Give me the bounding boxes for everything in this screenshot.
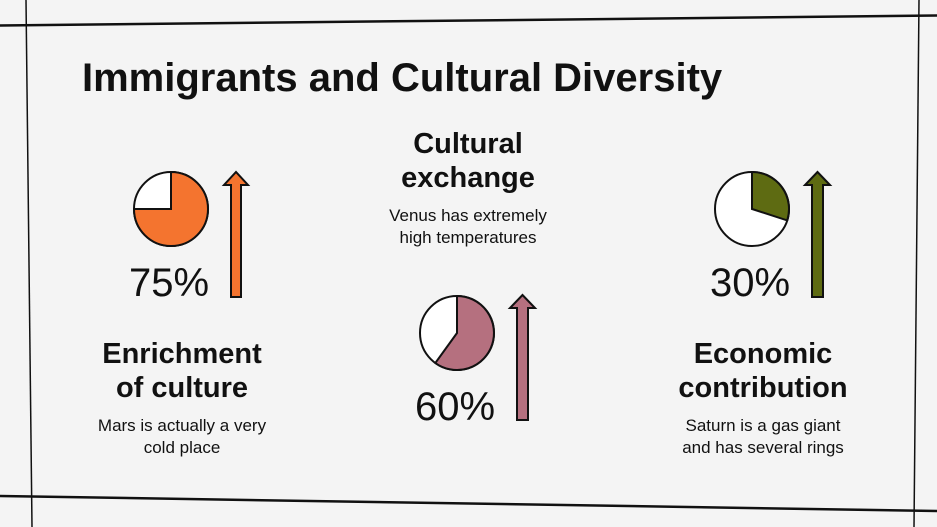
arrow olive bbox=[805, 172, 830, 297]
block: economic: contribution bbox=[678, 372, 848, 404]
block: cultural exchange bbox=[389, 128, 547, 247]
block: economic: Economic bbox=[694, 338, 832, 370]
block: cultural exchange: exchange bbox=[401, 162, 535, 194]
percent 30: 30% bbox=[710, 261, 790, 305]
block: enrichment: Enrichment bbox=[102, 338, 262, 370]
block: enrichment: of culture bbox=[116, 372, 248, 404]
block: enrichment: Mars is actually a very bbox=[98, 416, 266, 435]
block: enrichment: cold place bbox=[144, 438, 220, 457]
percent 60: 60% bbox=[415, 385, 495, 429]
percent 75: 75% bbox=[129, 261, 209, 305]
block: cultural exchange: Venus has extremely bbox=[389, 206, 547, 225]
pie 30% bbox=[715, 172, 789, 246]
title: Immigrants and Cultural Diversity bbox=[82, 56, 722, 100]
block: cultural exchange: Cultural bbox=[413, 128, 523, 160]
block: enrichment bbox=[98, 338, 266, 457]
pie 75% bbox=[134, 172, 208, 246]
block: economic: Saturn is a gas giant bbox=[686, 416, 840, 435]
block: cultural exchange: high temperatures bbox=[399, 228, 537, 247]
pie 60% bbox=[420, 296, 494, 370]
arrow mauve bbox=[510, 295, 535, 420]
block: economic bbox=[678, 338, 848, 457]
arrow orange bbox=[224, 172, 248, 297]
block: economic: and has several rings bbox=[682, 438, 844, 457]
